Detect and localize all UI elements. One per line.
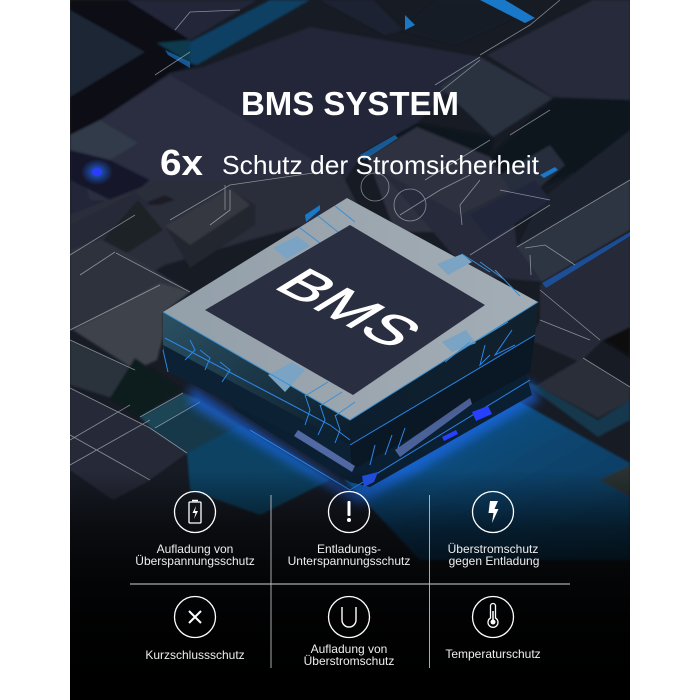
chip top rim [163, 198, 538, 420]
chip label: BMS [261, 260, 437, 356]
feature: discharge overcurrent: gegen Entladung [449, 554, 539, 568]
feature: short circuit [145, 596, 245, 662]
feature: overcurrent charging: Aufladung von [311, 642, 387, 656]
icon: thermometer [472, 596, 514, 638]
feature: overvoltage charging [135, 492, 255, 568]
icon: U [328, 596, 370, 638]
chip [163, 198, 540, 505]
feature: discharge undervoltage: Unterspannungsschutz [288, 554, 410, 568]
circuit trace lines [70, 0, 630, 480]
blue floor highlights [294, 398, 492, 487]
feature: overcurrent charging [304, 596, 394, 668]
bottom fade to black [70, 470, 630, 700]
feature: overcurrent charging: Überstromschutz [304, 654, 394, 668]
infographic canvas [70, 0, 630, 700]
icon: cross [174, 596, 216, 638]
feature: short circuit: Kurzschlussschutz [145, 648, 245, 662]
feature: discharge overcurrent [448, 492, 539, 568]
background photo: circuit board [70, 0, 630, 700]
grid dividers [130, 495, 570, 668]
icon: lightning bolt [472, 492, 514, 532]
chip circuit traces [163, 330, 535, 490]
feature: discharge overcurrent: Überstromschutz [448, 542, 538, 556]
icon: exclamation [328, 492, 370, 532]
feature: overvoltage charging: Aufladung von [157, 542, 233, 556]
feature: overvoltage charging: Überspannungsschutz [135, 554, 255, 568]
feature: temperature: Temperaturschutz [445, 647, 541, 661]
feature: discharge undervoltage: Entladungs- [317, 542, 381, 556]
icon: battery [174, 492, 216, 532]
chip dark centre [205, 225, 485, 395]
feature: temperature [445, 596, 541, 661]
subtitle: Schutz der Stromsicherheit [222, 150, 540, 180]
feature: discharge undervoltage [288, 492, 410, 568]
chip lower layer [232, 374, 532, 487]
rim blue grilles [268, 236, 476, 392]
blue glow slits [165, 0, 630, 288]
circuit plates, upper area [70, 0, 630, 560]
chip side right [350, 302, 538, 445]
subtitle [160, 142, 540, 183]
chip underglow [190, 380, 540, 505]
subtitle: 6x [160, 142, 203, 183]
rim segment dividers [163, 206, 538, 420]
blue glow spot, left [81, 159, 113, 185]
chip side left [163, 312, 350, 445]
title: BMS SYSTEM [241, 85, 459, 122]
